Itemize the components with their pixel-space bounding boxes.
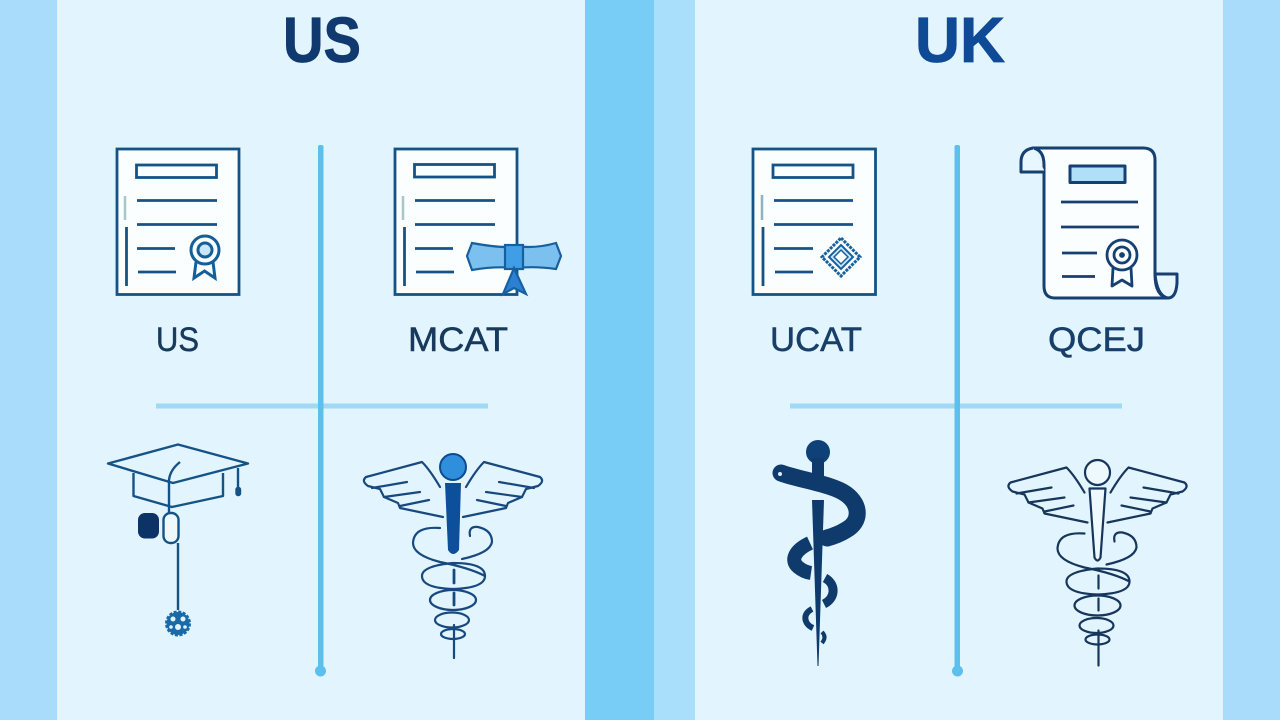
label: UCAT: UCAT — [770, 321, 862, 359]
heading: UK: UK — [915, 4, 1005, 76]
label: QCEJ: QCEJ — [1048, 321, 1145, 359]
icon: rosette seal — [191, 236, 219, 278]
panel: UK — [695, 0, 1223, 720]
icon: tassel ball — [166, 612, 190, 635]
icon: staff and orb — [440, 454, 466, 554]
icon: caduceus outline — [1008, 460, 1187, 666]
icon: diamond seal — [822, 238, 860, 276]
icon: rod of Asclepius — [778, 440, 857, 666]
label: US: US — [156, 321, 199, 359]
icon: US certificate document — [117, 149, 239, 294]
icon: scroll certificate — [1021, 148, 1177, 298]
heading: US: US — [283, 4, 361, 76]
icon: UCAT document — [753, 149, 876, 294]
icon: MCAT document with diploma — [395, 149, 561, 294]
icon: caduceus filled staff — [364, 454, 542, 658]
icon: graduation cap — [108, 444, 248, 635]
panel: US — [57, 0, 585, 720]
icon: scroll seal — [1107, 240, 1137, 286]
quadrant divider: US panel — [156, 145, 488, 676]
quadrant divider: UK panel — [790, 145, 1122, 676]
icon: rolled diploma — [467, 243, 561, 294]
label: MCAT: MCAT — [408, 321, 508, 359]
